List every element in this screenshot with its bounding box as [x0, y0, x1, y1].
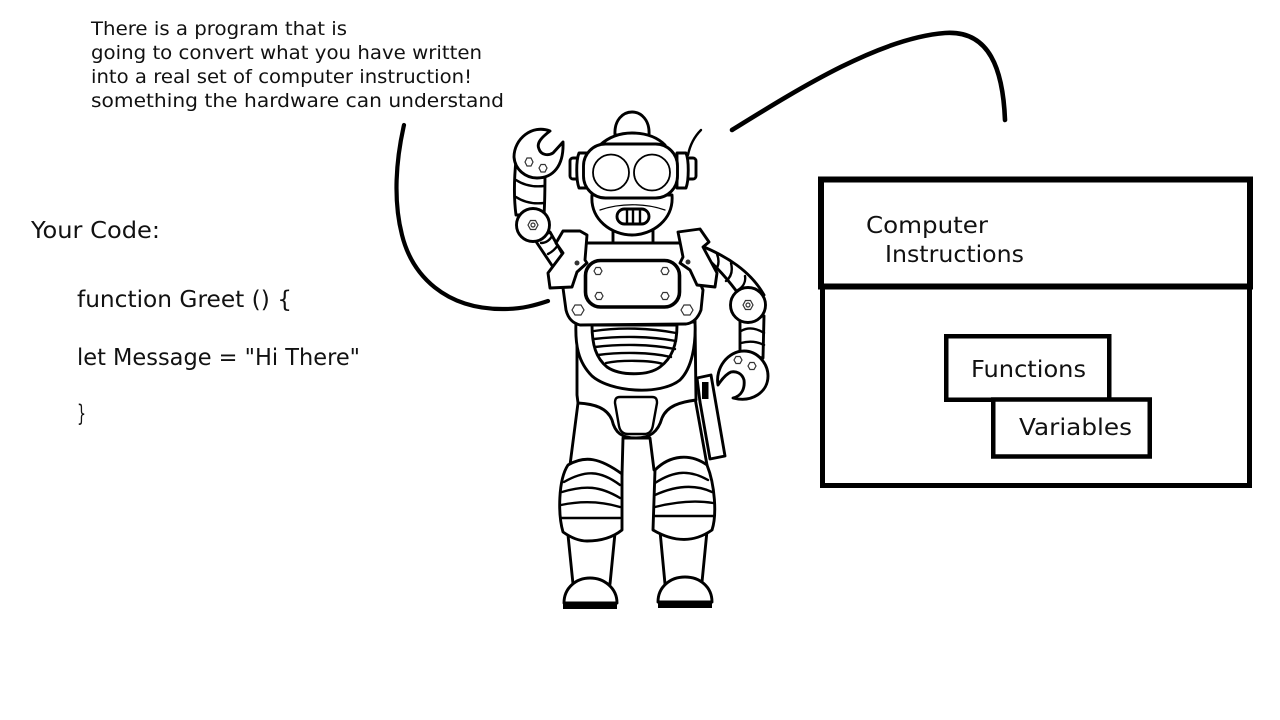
panel: computer instructions: [821, 180, 1250, 486]
explanation text: There is a program that is: [90, 18, 347, 40]
heading: computer instructions: Computer: [866, 213, 989, 239]
robot right arm and wrench: [703, 247, 768, 399]
robot shoulder pads: [548, 229, 717, 288]
explanation text: into a real set of computer instruction!: [91, 66, 472, 88]
box: variables: Variables: [1019, 415, 1132, 441]
robot holster: [697, 375, 725, 459]
code block: let Message = "Hi There": [77, 345, 360, 371]
robot torso: [576, 320, 696, 438]
explanation text: something the hardware can understand: [91, 90, 504, 112]
panel body: [822, 287, 1250, 486]
box: functions: [946, 336, 1109, 400]
robot chest: [563, 243, 703, 325]
box: variables: [993, 400, 1150, 456]
code block: function Greet () {: [77, 287, 292, 313]
your code heading: Your Code:: [30, 218, 160, 244]
robot left arm and wrench: [514, 129, 563, 267]
robot legs: [560, 398, 715, 584]
robot neck: [613, 228, 653, 243]
code block: [77, 287, 360, 427]
robot feet: [563, 577, 712, 609]
arrow: code to robot: [396, 125, 548, 309]
robot head: [570, 112, 701, 235]
robot illustration: [514, 112, 768, 609]
explanation text: [90, 18, 504, 112]
explanation text: going to convert what you have written: [91, 42, 482, 64]
heading: computer instructions: [866, 213, 1024, 268]
robot mouth: [617, 209, 649, 224]
heading: computer instructions: Instructions: [885, 242, 1024, 268]
arrow: robot to computer instructions: [732, 33, 1005, 130]
box: functions: Functions: [971, 357, 1086, 383]
panel header: [821, 180, 1250, 286]
crotch plate: [615, 397, 657, 434]
code block: }: [77, 401, 86, 427]
